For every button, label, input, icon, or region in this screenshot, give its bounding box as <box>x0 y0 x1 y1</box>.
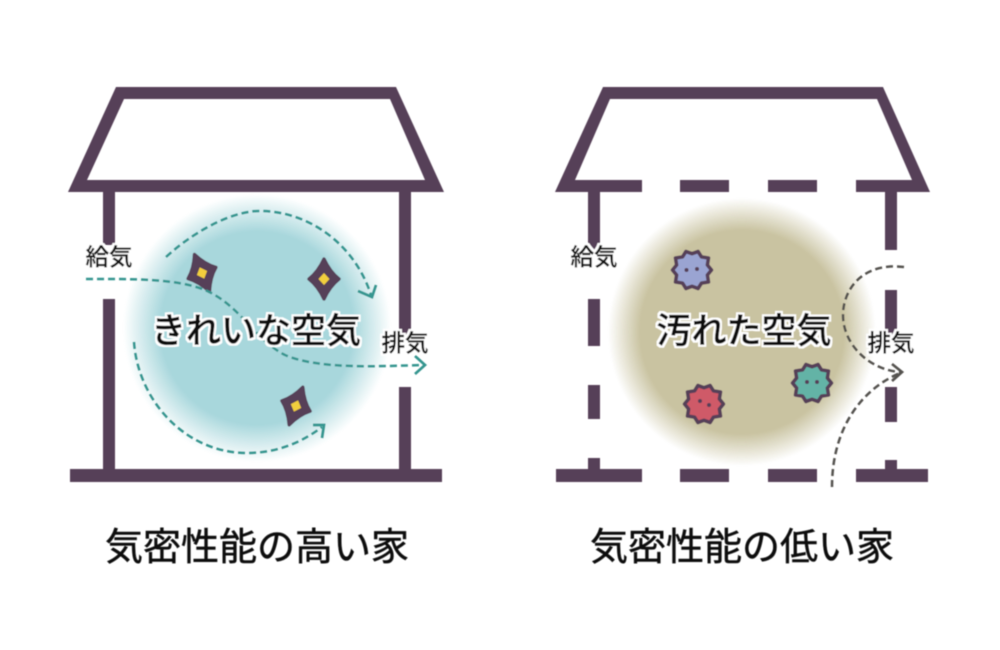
floor with gaps <box>556 469 928 482</box>
icon: teal germ <box>792 364 832 402</box>
panel: low airtightness house <box>555 87 930 569</box>
label: clean air: きれいな空気 <box>151 312 361 351</box>
house walls and floor <box>70 190 442 482</box>
icon: sparkle upper right <box>309 259 339 299</box>
icon: sparkle upper left <box>181 249 223 297</box>
icon: blue germ <box>672 252 712 288</box>
arrow: lower circulation <box>134 342 324 453</box>
heading: low airtightness: 気密性能の低い家 <box>590 527 894 569</box>
label: supply air: 給気 <box>86 244 132 270</box>
label: dirty air: 汚れた空気 <box>656 312 832 351</box>
arrow: air leaking in from top <box>843 266 904 372</box>
label: exhaust air: 排気 <box>868 330 914 356</box>
panel: high airtightness house <box>68 87 444 569</box>
dirty air cloud <box>608 198 876 466</box>
icon: red germ <box>684 386 724 422</box>
arrow: upper circulation <box>166 211 376 297</box>
clean air cloud <box>123 194 391 462</box>
arrow: supply to exhaust <box>86 279 425 374</box>
arrowhead: exhaust <box>892 364 902 381</box>
label: exhaust air: 排気 <box>382 330 428 356</box>
heading: high airtightness: 気密性能の高い家 <box>105 527 409 569</box>
label: supply air: 給気 <box>570 244 618 270</box>
walls with gaps <box>588 190 897 471</box>
icon: sparkle lower <box>275 382 317 430</box>
house roof with gaps <box>555 87 930 192</box>
house roof <box>68 87 444 192</box>
arrow: air leaking in from bottom <box>832 373 900 487</box>
